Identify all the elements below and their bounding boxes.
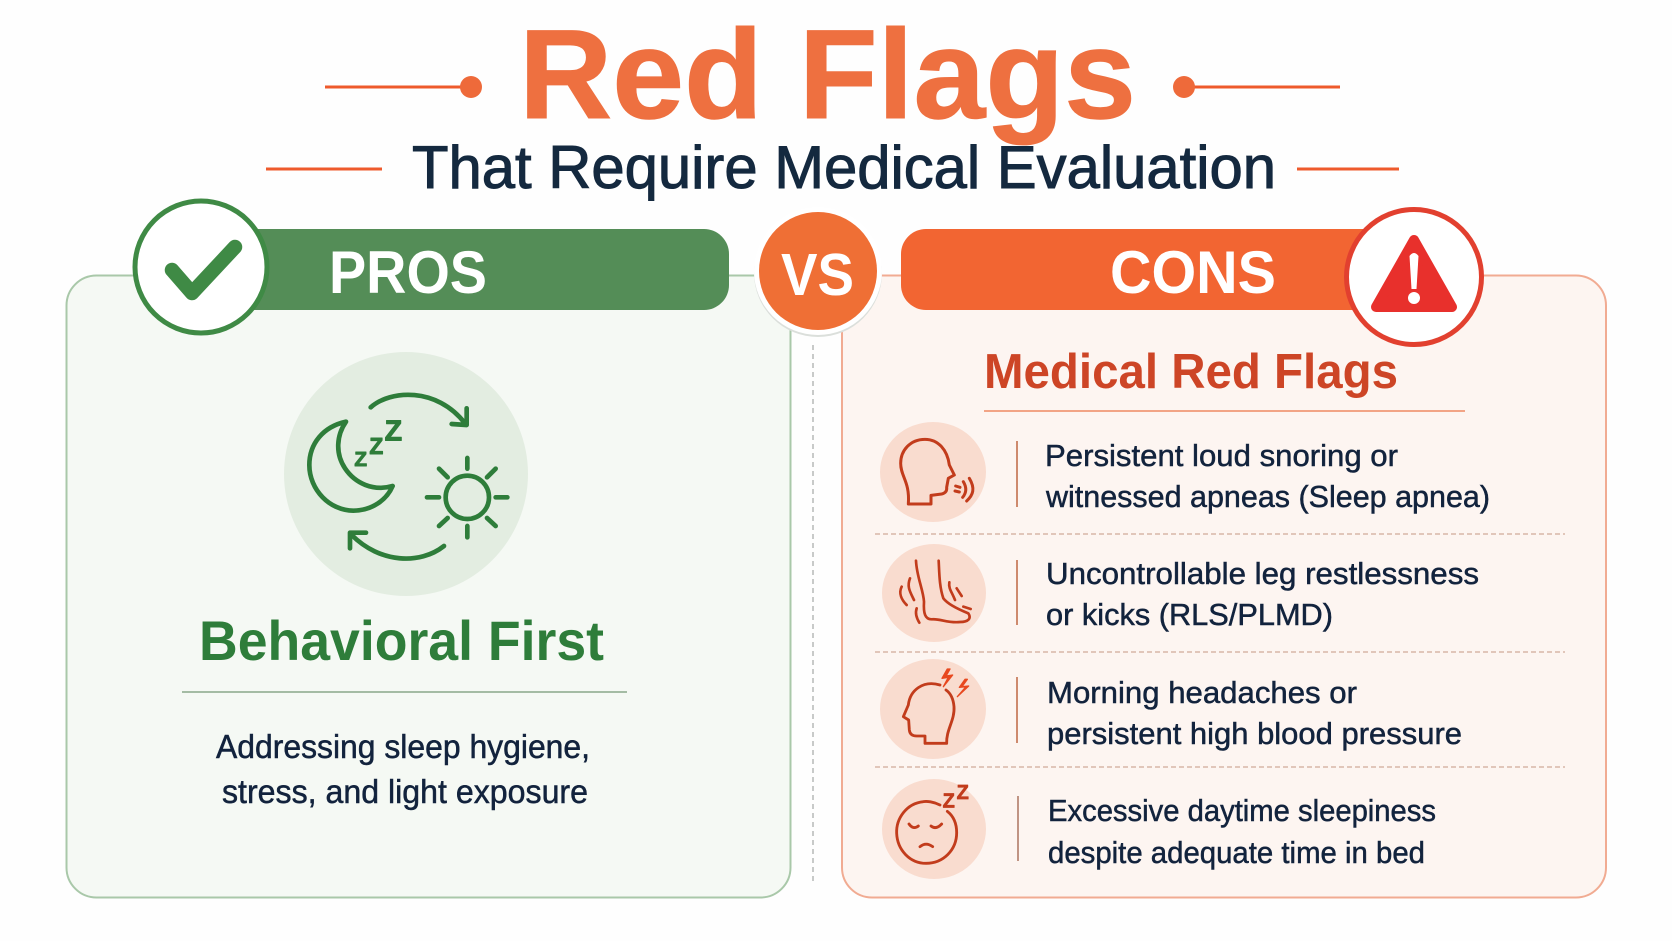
icon: sleep and wake cycle: Z (369, 433, 383, 459)
cons header bar (901, 229, 1421, 310)
row: morning headaches: persistent high blood pressure (1047, 716, 1462, 751)
icon: sleepy face: Z (957, 782, 969, 804)
row: snoring: Persistent loud snoring or (1045, 438, 1398, 473)
cons heading: Medical Red Flags (984, 345, 1398, 399)
title ornament right (1173, 76, 1340, 98)
panel: pros (66, 276, 790, 898)
icon: warning badge (1346, 210, 1482, 344)
pros header label: PROS (329, 239, 487, 306)
subtitle: That Require Medical Evaluation (412, 134, 1276, 201)
panel: cons (842, 276, 1606, 898)
pros header bar (200, 229, 729, 310)
subtitle rule left (266, 168, 382, 170)
icon: sleepy face (882, 779, 986, 879)
row: leg restlessness (882, 544, 1479, 642)
vs badge: VS (781, 242, 854, 308)
icon: sleepy face: Z (943, 790, 955, 812)
pros body text: Addressing sleep hygiene, (216, 728, 590, 765)
pros divider (182, 691, 627, 693)
pros heading: Behavioral First (199, 609, 604, 672)
center divider (812, 345, 814, 885)
cons heading divider (984, 410, 1465, 412)
cons header label: CONS (1110, 239, 1276, 306)
pros body text: stress, and light exposure (222, 773, 588, 810)
icon: restless foot (882, 544, 986, 642)
row: morning headaches (880, 659, 1462, 759)
icon: sleep and wake cycle: Z (385, 416, 402, 448)
icon: sleep and wake cycle: Z (354, 448, 367, 471)
row: snoring: witnessed apneas (Sleep apnea) (1045, 479, 1490, 514)
row: morning headaches: Morning headaches or (1047, 675, 1357, 710)
title: Red Flags (519, 3, 1136, 145)
row: leg restlessness: or kicks (RLS/PLMD) (1046, 597, 1333, 632)
title ornament left (325, 76, 482, 98)
icon: check badge (135, 201, 267, 333)
vs badge (754, 207, 882, 337)
icon: head with lightning (880, 659, 986, 759)
row: leg restlessness: Uncontrollable leg restlessness (1046, 556, 1479, 591)
pros body text (216, 728, 590, 810)
row: snoring (880, 422, 1490, 522)
row: daytime sleepiness (882, 779, 1436, 879)
row: daytime sleepiness: Excessive daytime sleepiness (1048, 793, 1436, 828)
icon: sleep and wake cycle (284, 352, 528, 596)
icon: head with sound (880, 422, 986, 522)
row: daytime sleepiness: despite adequate time in bed (1048, 835, 1425, 870)
subtitle rule right (1297, 168, 1399, 170)
